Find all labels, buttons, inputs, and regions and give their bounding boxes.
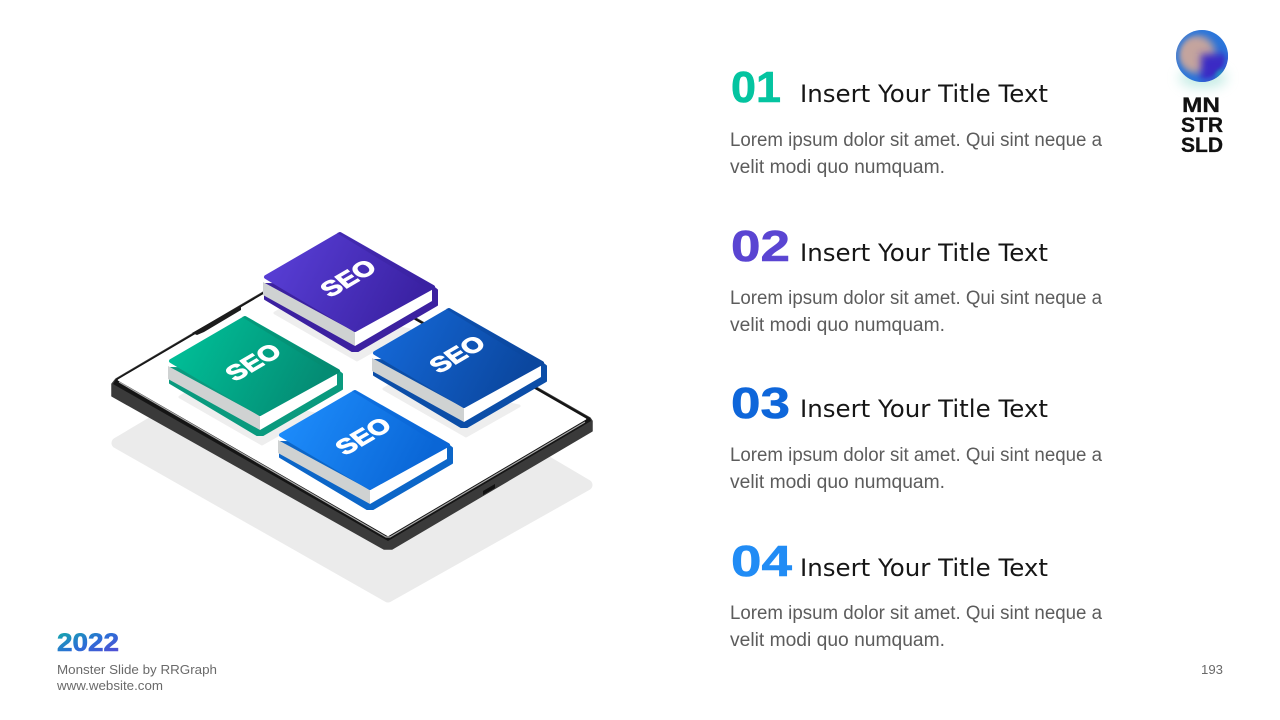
number 03: 03 [731, 379, 790, 428]
book: green SEO [168, 316, 342, 444]
title 03: Insert Your Title Text [800, 395, 1048, 423]
icon: glowing orb [1176, 30, 1231, 88]
book: purple SEO [263, 232, 437, 360]
item 03 [730, 379, 1102, 493]
illustration: tablet with SEO books [112, 232, 592, 597]
body 04: velit modi quo numquam. [730, 630, 945, 651]
item 01 [730, 63, 1102, 178]
body 02: velit modi quo numquam. [730, 315, 945, 336]
body 04: Lorem ipsum dolor sit amet. Qui sint neque a [730, 603, 1102, 624]
book: bright blue SEO [278, 390, 452, 509]
item 02 [730, 222, 1102, 336]
book: bright blue SEO: SEO [330, 413, 398, 460]
number 04: 04 [731, 537, 793, 586]
item 04 [730, 537, 1102, 651]
logo wordmark: STR [1181, 114, 1223, 137]
body 02: Lorem ipsum dolor sit amet. Qui sint neque a [730, 288, 1102, 309]
page number: 193 [1201, 662, 1223, 677]
book: purple SEO: SEO [315, 255, 383, 302]
logo [1176, 30, 1231, 157]
body 01: Lorem ipsum dolor sit amet. Qui sint neque a [730, 130, 1102, 151]
book: green SEO: SEO [220, 339, 288, 386]
title 04: Insert Your Title Text [800, 554, 1048, 582]
number 02: 02 [731, 222, 790, 271]
logo wordmark: MN [1182, 94, 1220, 117]
title 02: Insert Your Title Text [800, 239, 1048, 267]
footer credits: www.website.com [56, 678, 163, 693]
tablet drop shadow [117, 325, 587, 597]
number 01: 01 [731, 63, 781, 112]
body 01: velit modi quo numquam. [730, 157, 945, 178]
book: dark blue SEO: SEO [424, 331, 492, 378]
footer credits: Monster Slide by RRGraph [57, 662, 217, 677]
body 03: Lorem ipsum dolor sit amet. Qui sint neque a [730, 445, 1102, 466]
logo wordmark: SLD [1181, 134, 1223, 157]
body 03: velit modi quo numquam. [730, 472, 945, 493]
tablet device [112, 261, 592, 549]
title 01: Insert Your Title Text [800, 80, 1048, 108]
footer year: 2022 [57, 629, 119, 657]
book: dark blue SEO [372, 308, 546, 436]
